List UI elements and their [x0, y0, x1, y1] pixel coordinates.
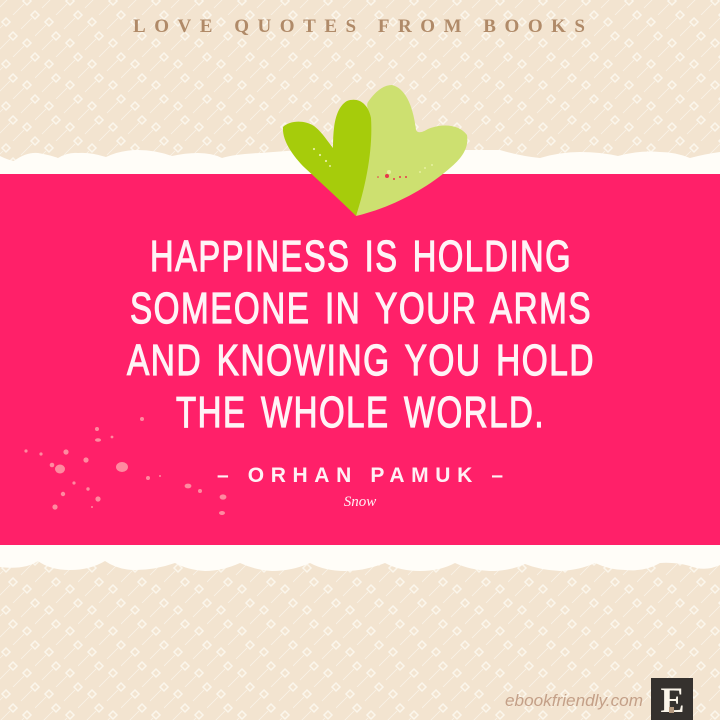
pink quote band — [0, 174, 720, 545]
quote line 1: HAPPINESS IS HOLDING — [150, 232, 572, 281]
light green heart — [356, 85, 467, 216]
speckles — [313, 148, 433, 174]
quote text — [127, 232, 595, 437]
site name: ebookfriendly.com — [505, 692, 643, 710]
logo: E badge — [651, 678, 693, 720]
author: – ORHAN PAMUK – — [217, 464, 503, 487]
ink splatter — [24, 417, 226, 515]
top scalloped white paper edge — [0, 150, 720, 176]
title: LOVE QUOTES FROM BOOKS — [133, 16, 585, 37]
logo: E badge: E — [660, 680, 685, 720]
quote line 4: THE WHOLE WORLD. — [176, 388, 545, 437]
bottom scalloped white paper edge — [0, 543, 720, 571]
dark green heart — [283, 100, 371, 216]
book title: Snow — [344, 494, 376, 510]
icon: green hearts — [283, 85, 467, 216]
